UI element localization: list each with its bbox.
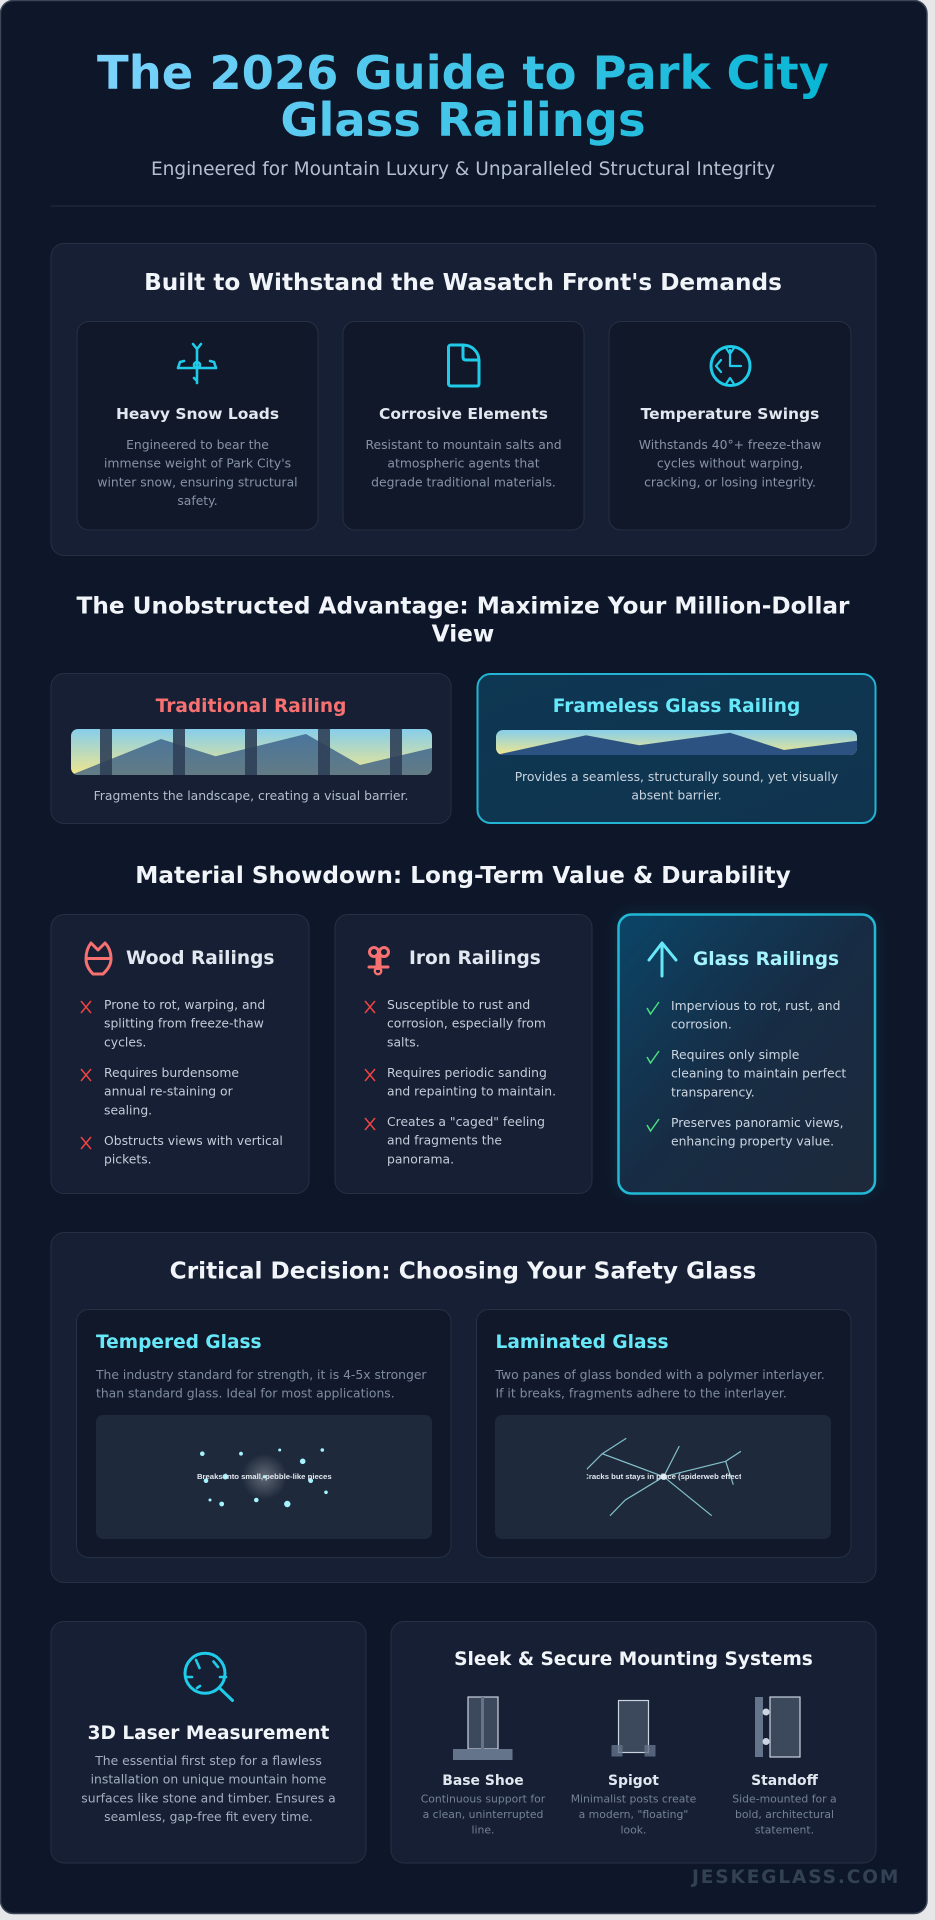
list: iron drawbacks: [365, 998, 556, 1166]
description: a modern, "floating": [579, 1808, 688, 1821]
panel: 3D laser measurement: [51, 1622, 366, 1863]
panel text: The essential first step for a flawless: [94, 1754, 322, 1768]
panel: wood railings: [51, 914, 309, 1194]
card title: Tempered Glass: [96, 1332, 262, 1353]
illustration: fragmented view: [71, 729, 432, 775]
card: tempered glass: [76, 1310, 451, 1558]
card text: If it breaks, fragments adhere to the interlayer.: [496, 1387, 787, 1401]
heading: unobstructed advantage: View: [432, 620, 494, 647]
list: wood drawbacks: cycles.: [104, 1035, 146, 1049]
panel text: seamless, gap-free fit every time.: [104, 1810, 313, 1824]
panel title: Wood Railings: [126, 948, 274, 969]
item: spigot: [571, 1700, 697, 1836]
list: iron drawbacks: Requires periodic sanding: [387, 1066, 547, 1080]
panel: glass railings: [618, 914, 875, 1194]
caption: Provides a seamless, structurally sound, yet visually: [515, 770, 838, 784]
heading: material showdown: Material Showdown: Long-Term Value & Durability: [135, 862, 791, 889]
card text: The industry standard for strength, it is 4-5x stronger: [95, 1368, 427, 1382]
illustration: pebble fragments: Breaks into small, pebble-like pieces: [197, 1472, 332, 1481]
item: base shoe: [421, 1697, 546, 1836]
icon: arrow up: [649, 943, 676, 976]
card text: immense weight of Park City's: [104, 457, 291, 471]
heading: Built to Withstand the Wasatch Front's Demands: [144, 269, 782, 296]
card text: atmospheric agents that: [387, 457, 540, 471]
description: a clean, uninterrupted: [423, 1808, 543, 1821]
list: glass benefits: transparency.: [671, 1085, 755, 1099]
card text: Resistant to mountain salts and: [365, 438, 562, 452]
illustration: pebble fragments: [96, 1415, 432, 1539]
panel: frameless glass railing: [478, 674, 876, 823]
icon: base shoe: [453, 1697, 512, 1760]
description: Continuous support for: [421, 1793, 546, 1806]
list: glass benefits: cleaning to maintain perfect: [671, 1067, 846, 1081]
watermark: JESKEGLASS.COM: [690, 1867, 900, 1888]
list: iron drawbacks: Susceptible to rust and: [387, 998, 530, 1012]
card: heavy snow loads: [77, 322, 318, 530]
label: Spigot: [608, 1773, 659, 1789]
icon: iron: [369, 948, 388, 974]
description: look.: [621, 1824, 646, 1836]
list: iron drawbacks: Creates a "caged" feeling: [387, 1115, 545, 1129]
card title: Heavy Snow Loads: [116, 405, 279, 423]
card text: safety.: [177, 494, 218, 508]
list: iron drawbacks: corrosion, especially from: [387, 1017, 546, 1031]
description: line.: [472, 1824, 494, 1836]
list: glass benefits: Preserves panoramic views,: [671, 1116, 844, 1130]
list: glass benefits: Impervious to rot, rust, and: [671, 999, 840, 1013]
title: The 2026 Guide to Park City: [97, 46, 829, 100]
list: wood drawbacks: pickets.: [104, 1153, 152, 1167]
panel title: Traditional Railing: [156, 696, 346, 717]
list: glass benefits: [647, 999, 846, 1149]
list: iron drawbacks: salts.: [387, 1035, 420, 1049]
list: wood drawbacks: [81, 998, 283, 1167]
panel title: Frameless Glass Railing: [553, 696, 800, 717]
icon: clock: [711, 346, 750, 386]
card: laminated glass: [476, 1310, 851, 1558]
icon: wood: [86, 943, 111, 974]
item: standoff: [732, 1697, 837, 1836]
list: wood drawbacks: Prone to rot, warping, and: [104, 998, 265, 1012]
icon: spigot: [612, 1700, 656, 1756]
list: iron drawbacks: panorama.: [387, 1152, 454, 1166]
list: wood drawbacks: Obstructs views with vertical: [104, 1134, 283, 1148]
list: glass benefits: corrosion.: [671, 1018, 732, 1032]
label: Standoff: [751, 1773, 819, 1789]
panel title: Sleek & Secure Mounting Systems: [454, 1649, 813, 1670]
label: Base Shoe: [442, 1773, 524, 1789]
list: wood drawbacks: annual re-staining or: [104, 1085, 234, 1099]
card text: degrade traditional materials.: [371, 475, 556, 489]
card: corrosive elements: [343, 322, 584, 530]
list: iron drawbacks: and fragments the: [387, 1134, 502, 1148]
header: [51, 46, 876, 207]
panel: mounting systems: [391, 1622, 876, 1863]
icon: standoff: [755, 1697, 800, 1757]
panel title: 3D Laser Measurement: [88, 1723, 330, 1744]
card title: Laminated Glass: [496, 1332, 669, 1353]
panel: iron railings: [335, 914, 592, 1194]
card text: cycles without warping,: [657, 457, 803, 471]
icon: document: [448, 345, 479, 386]
list: glass benefits: Requires only simple: [671, 1048, 799, 1062]
panel: built to withstand: [51, 244, 876, 556]
list: glass benefits: enhancing property value.: [671, 1135, 834, 1149]
title second line: Glass Railings: [280, 93, 646, 147]
illustration: spiderweb cracks: [495, 1415, 831, 1539]
icon: snow: [178, 344, 216, 383]
list: wood drawbacks: sealing.: [104, 1103, 152, 1117]
list: wood drawbacks: Requires burdensome: [104, 1066, 239, 1080]
list: wood drawbacks: splitting from freeze-thaw: [104, 1017, 264, 1031]
illustration: open view: [496, 730, 857, 755]
card text: Two panes of glass bonded with a polymer interlayer.: [494, 1368, 825, 1382]
panel title: Iron Railings: [409, 948, 541, 969]
icon: magnifier: [185, 1653, 232, 1700]
panel text: surfaces like stone and timber. Ensures a: [81, 1791, 336, 1805]
panel: safety glass: [51, 1232, 876, 1582]
illustration: spiderweb cracks: Cracks but stays in place (spiderweb effect): [583, 1472, 745, 1481]
subtitle: Engineered for Mountain Luxury & Unparalleled Structural Integrity: [151, 159, 775, 180]
card text: winter snow, ensuring structural: [97, 475, 298, 489]
caption: absent barrier.: [631, 789, 722, 803]
panel text: installation on unique mountain home: [91, 1773, 326, 1787]
heading: Critical Decision: Choosing Your Safety Glass: [170, 1258, 756, 1284]
card title: Temperature Swings: [641, 405, 819, 423]
card: temperature swings: [609, 322, 851, 530]
card title: Corrosive Elements: [379, 405, 548, 423]
caption: Fragments the landscape, creating a visual barrier.: [94, 789, 408, 803]
card text: Withstands 40°+ freeze-thaw: [639, 438, 821, 452]
description: Side-mounted for a: [732, 1793, 837, 1806]
description: statement.: [755, 1824, 814, 1836]
panel title: Glass Railings: [693, 949, 839, 970]
card text: Engineered to bear the: [126, 438, 269, 452]
description: bold, architectural: [735, 1808, 834, 1821]
card text: than standard glass. Ideal for most applications.: [96, 1387, 395, 1401]
panel: traditional railing: [51, 674, 451, 824]
heading: unobstructed advantage: The Unobstructed Advantage: Maximize Your Million-Dollar: [77, 592, 850, 620]
description: Minimalist posts create: [571, 1793, 697, 1806]
list: iron drawbacks: and repainting to maintain.: [387, 1085, 556, 1099]
card text: cracking, or losing integrity.: [644, 475, 816, 489]
